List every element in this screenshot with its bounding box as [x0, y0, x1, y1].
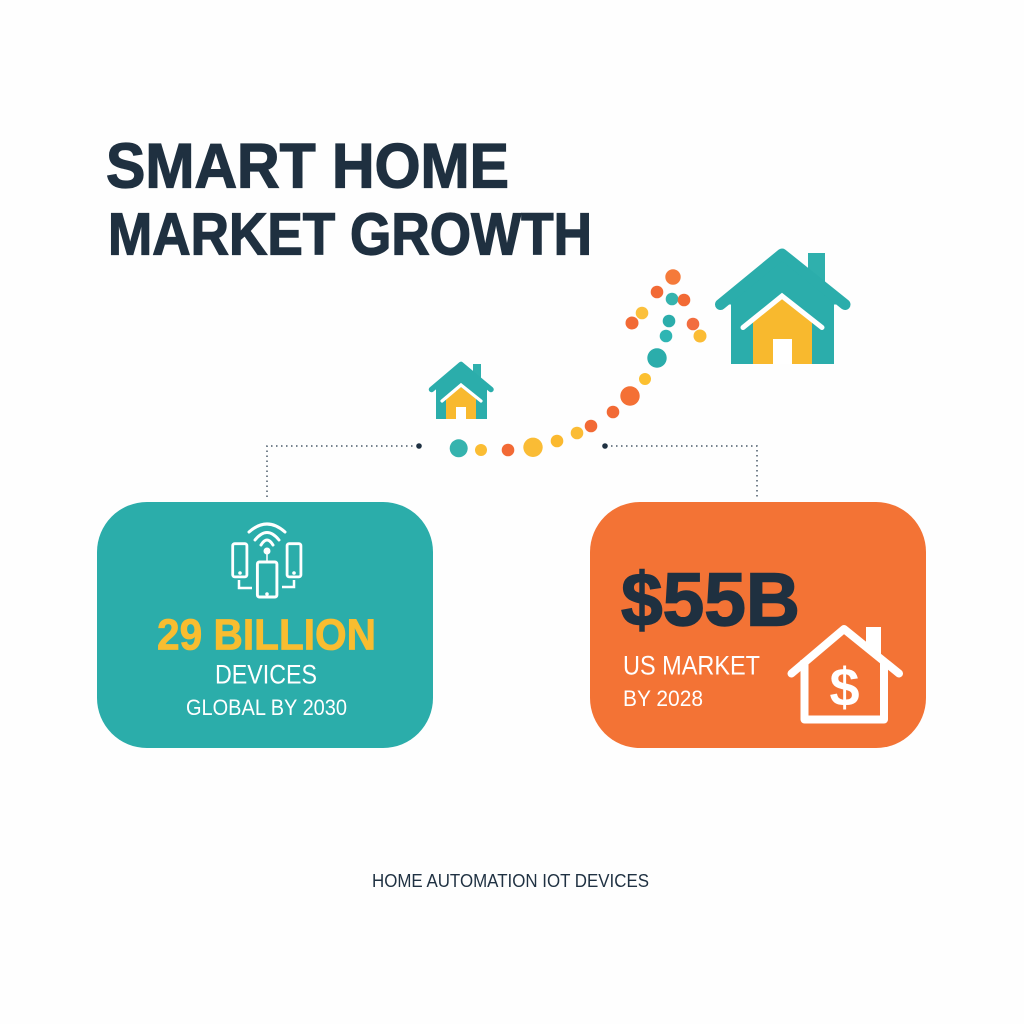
footer caption: HOME AUTOMATION IOT DEVICES [372, 871, 649, 891]
label: devices: DEVICES [215, 660, 317, 690]
dotted connector right [602, 443, 757, 497]
growth dot trail [450, 269, 706, 457]
panel: global devices [97, 502, 433, 748]
title [106, 132, 592, 268]
stat: 29 billion: 29 BILLION [157, 612, 376, 660]
icon: large house [720, 253, 845, 364]
stat: $55B: $55B [621, 558, 800, 642]
title: MARKET GROWTH [108, 202, 592, 268]
dotted connector left [267, 443, 422, 497]
icon: house with dollar: $ [829, 658, 860, 718]
icon: small house [432, 364, 491, 419]
icon: house with dollar [792, 627, 899, 720]
title: SMART HOME [106, 132, 509, 202]
panel: US market [590, 502, 926, 748]
label: global by 2030: GLOBAL BY 2030 [186, 695, 347, 720]
label: US market: US MARKET [623, 650, 760, 680]
icon: connected phones with wifi [233, 524, 301, 597]
label: by 2028: BY 2028 [623, 686, 703, 711]
